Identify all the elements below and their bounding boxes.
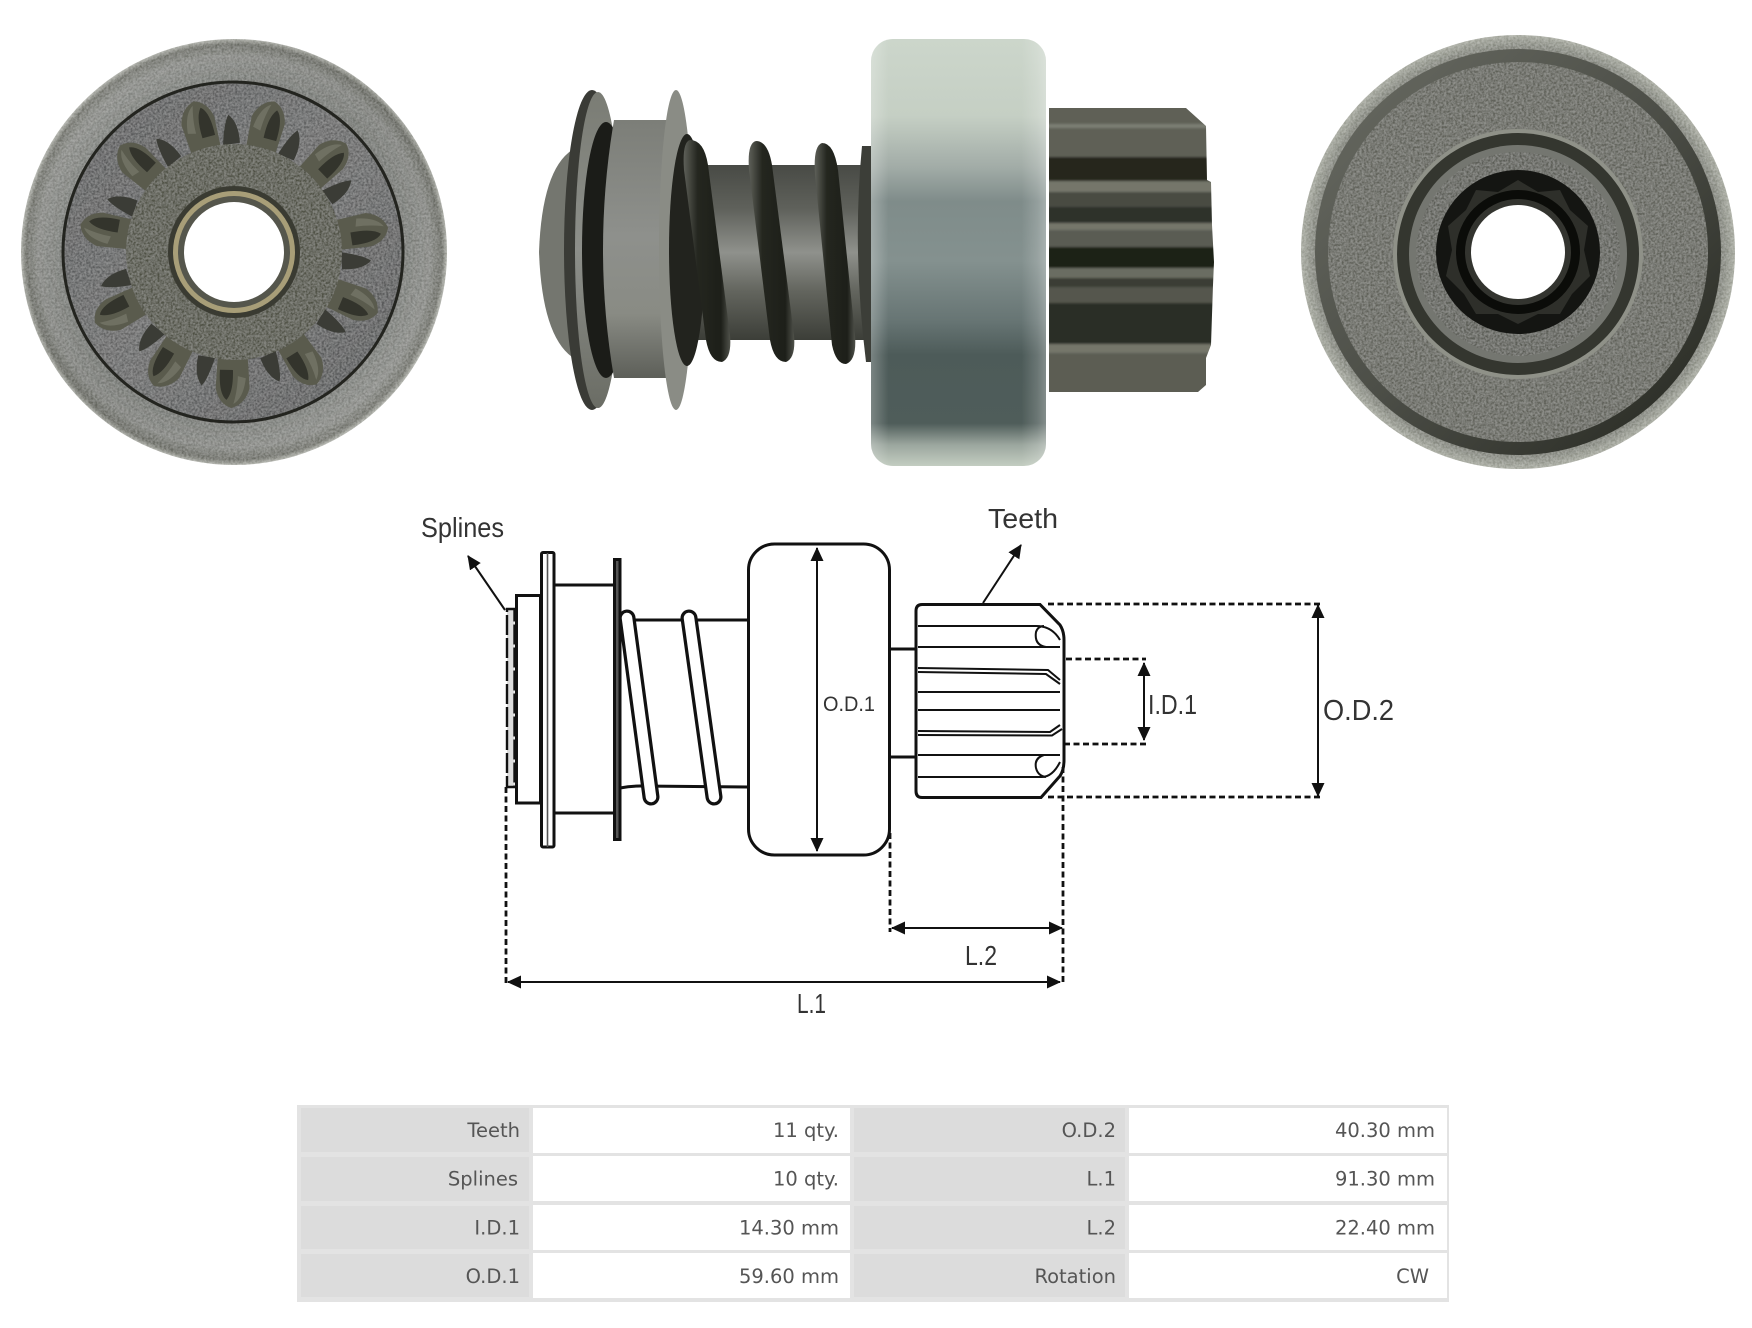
pinion outline	[916, 604, 1064, 798]
row: I.D.1 / L.2: L.2	[1087, 1216, 1116, 1240]
spring coil two	[689, 618, 714, 797]
spring coil one	[627, 618, 651, 797]
hub	[603, 120, 672, 378]
row: Splines / L.1: 10 qty.	[773, 1168, 839, 1190]
label: O.D.1: O.D.1	[823, 693, 875, 716]
splines leader arrow	[468, 556, 505, 610]
row: Teeth / O.D.2	[301, 1108, 1447, 1153]
spring coil one	[684, 140, 730, 362]
row: Splines / L.1: L.1	[1087, 1168, 1116, 1190]
I.D.1 arrow	[1143, 663, 1145, 740]
row: Teeth / O.D.2: 11 qty.	[773, 1119, 839, 1142]
specification table	[297, 1105, 1449, 1302]
row: Splines / L.1	[301, 1156, 1447, 1201]
row: Teeth / O.D.2: 40.30 mm	[1335, 1119, 1435, 1142]
O.D.2 arrow	[1317, 605, 1319, 796]
photo: drive side view	[539, 90, 876, 410]
photo: pinion teeth	[1045, 104, 1220, 397]
second flange	[614, 560, 620, 840]
L.2 arrow	[892, 927, 1062, 929]
technical diagram	[468, 544, 1323, 986]
row: O.D.1 / Rotation: 59.60 mm	[739, 1265, 839, 1288]
row: O.D.1 / Rotation: CW	[1396, 1265, 1429, 1288]
photo: grey housing	[871, 39, 1046, 466]
shaft	[694, 165, 876, 340]
end collar	[516, 596, 540, 803]
row: O.D.1 / Rotation: O.D.1	[466, 1265, 520, 1288]
label: Splines: Splines	[421, 512, 504, 543]
spring coil two	[749, 141, 794, 362]
teeth leader arrow	[983, 545, 1021, 603]
neck	[890, 649, 916, 757]
photo: drive front view with gear teeth	[21, 39, 447, 465]
splines end	[507, 607, 521, 789]
second flange	[659, 90, 705, 410]
end cap	[539, 150, 572, 357]
row: I.D.1 / L.2: I.D.1	[474, 1216, 520, 1240]
row: I.D.1 / L.2: 22.40 mm	[1335, 1216, 1435, 1240]
row: Teeth / O.D.2: O.D.2	[1062, 1119, 1116, 1142]
pinion tooth lines	[918, 626, 1062, 777]
dashed dimension lines	[506, 604, 1323, 986]
row: O.D.1 / Rotation	[301, 1253, 1447, 1298]
row: Splines / L.1: 91.30 mm	[1335, 1168, 1435, 1190]
photo: drive rear view	[1301, 35, 1735, 469]
label: L.1: L.1	[797, 988, 826, 1019]
first flange	[542, 552, 554, 847]
row: I.D.1 / L.2: 14.30 mm	[739, 1216, 839, 1240]
shaft outline	[620, 620, 748, 788]
row: Teeth / O.D.2: Teeth	[466, 1119, 520, 1142]
row: Splines / L.1: Splines	[448, 1168, 518, 1190]
L.1 arrow	[508, 981, 1060, 983]
label: O.D.2: O.D.2	[1323, 695, 1394, 727]
label: I.D.1: I.D.1	[1148, 689, 1197, 720]
label: L.2: L.2	[965, 940, 997, 971]
hub outline	[554, 585, 614, 813]
row: O.D.1 / Rotation: Rotation	[1034, 1265, 1116, 1288]
row: I.D.1 / L.2	[301, 1205, 1447, 1250]
first flange	[564, 90, 630, 410]
O.D.1 arrow	[816, 548, 818, 851]
label: Teeth: Teeth	[988, 503, 1058, 534]
housing outline	[748, 544, 890, 855]
spring coil three	[815, 143, 855, 364]
